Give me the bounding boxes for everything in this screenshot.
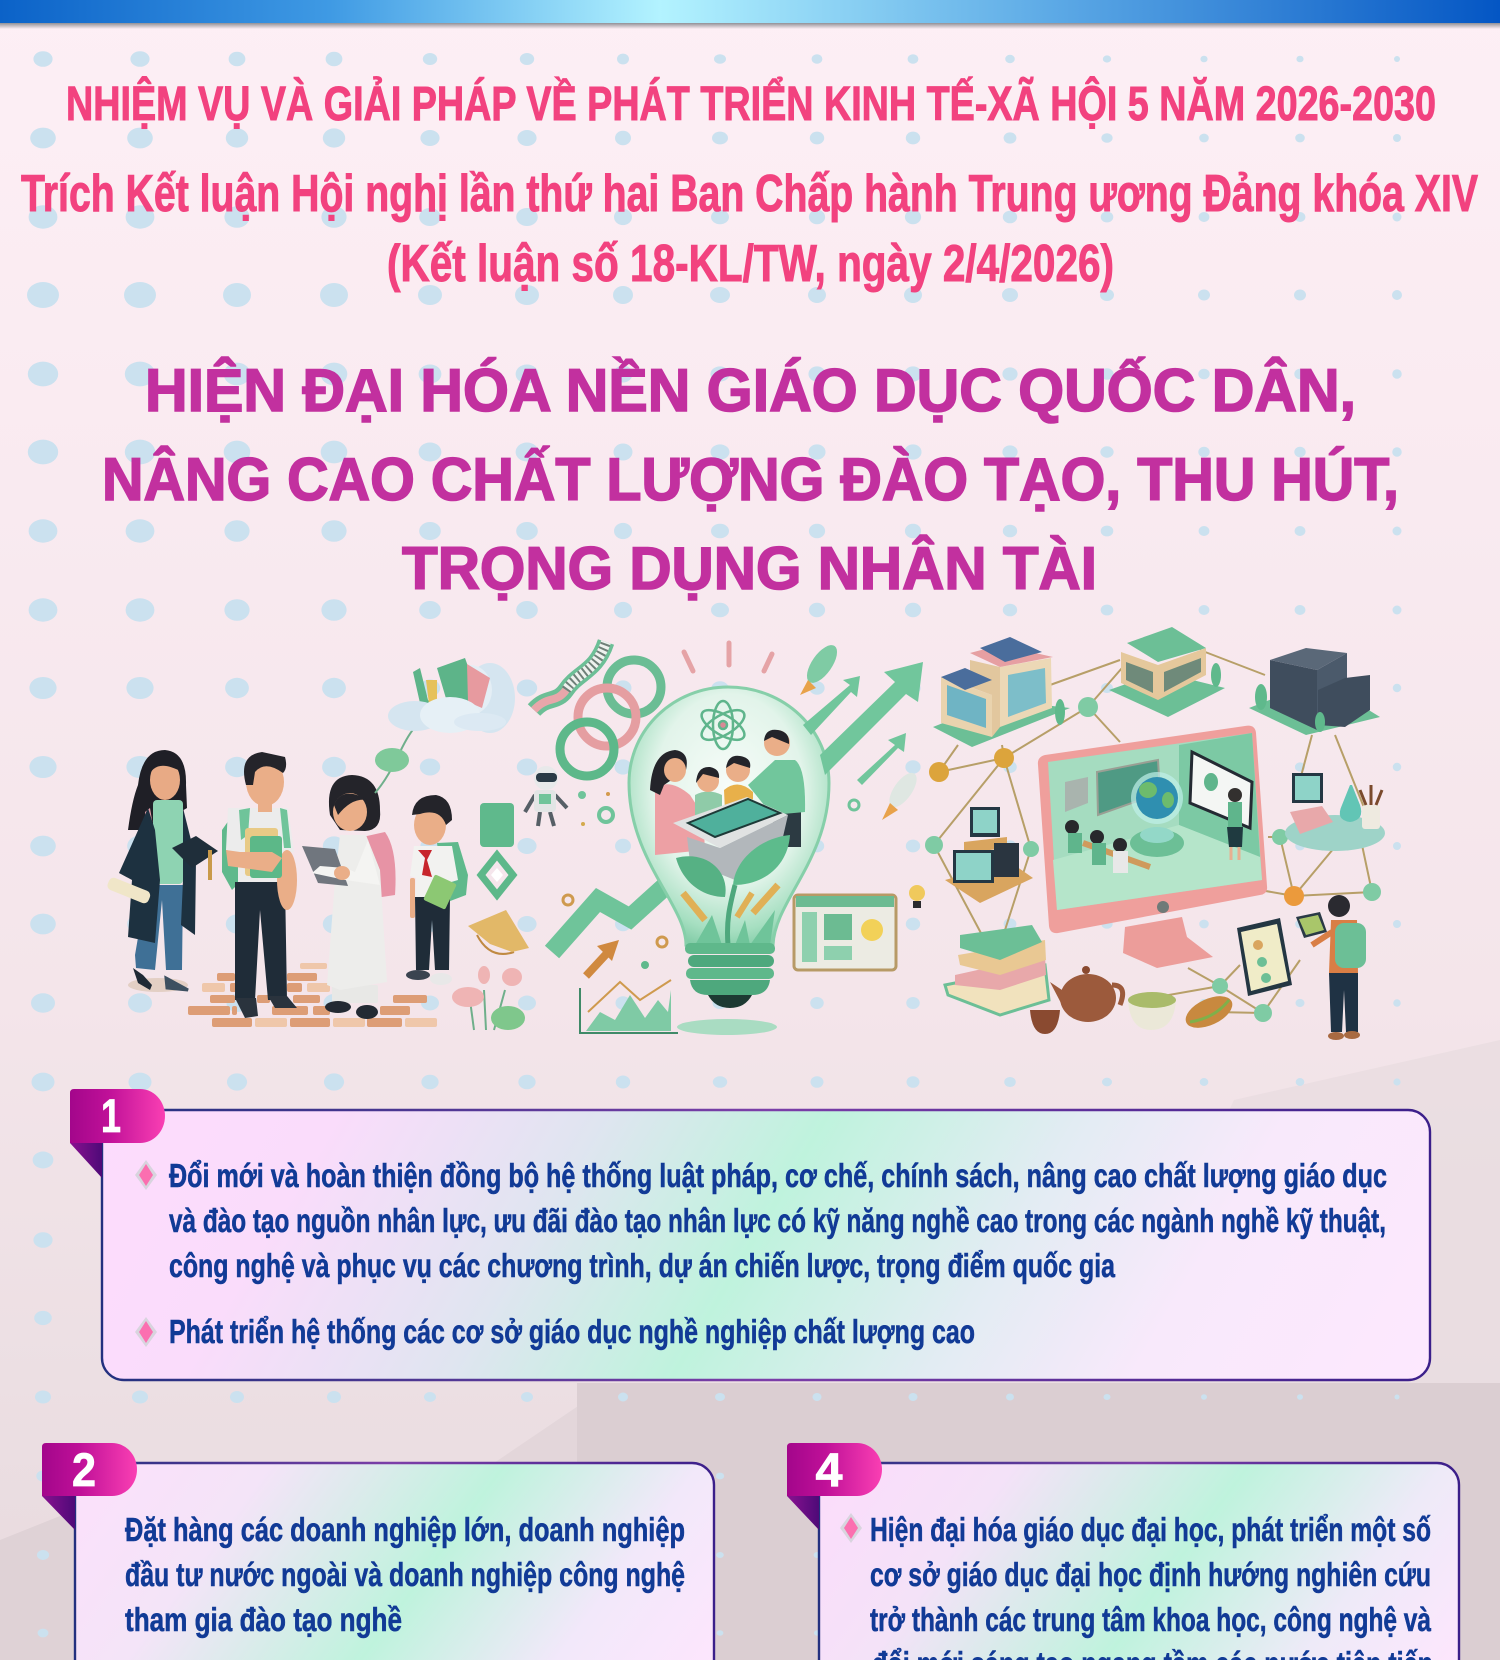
card 4: [787, 1443, 1459, 1660]
DNA helix: [534, 642, 606, 710]
light rays: [684, 643, 772, 671]
card 4 badge: 4: [816, 1443, 842, 1496]
title: reference line: (Kết luận số 18-KL/TW, ngày 2/4/2026): [387, 235, 1114, 293]
ao dai schoolgirl: [302, 775, 396, 1019]
student with tablet and backpack: [1296, 895, 1366, 1040]
bulb screw base: [685, 943, 775, 1008]
heading: [102, 357, 1399, 602]
card 2 text: [125, 1511, 685, 1638]
card 1 badge: [70, 1089, 165, 1178]
card 2 text: Đặt hàng các doanh nghiệp lớn, doanh nghiệp: [125, 1511, 685, 1548]
bricks: [188, 963, 437, 1027]
illustration: [106, 627, 1385, 1040]
school building: [933, 637, 1070, 747]
teacher: [1227, 788, 1243, 860]
phone checklist: [1237, 918, 1292, 996]
pho bowl: [1128, 992, 1176, 1030]
conical hat: [468, 910, 529, 954]
banh mi: [1181, 990, 1237, 1034]
heading: TRỌNG DỤNG NHÂN TÀI: [402, 535, 1097, 602]
green ground shadow: [677, 1019, 777, 1035]
zigzag arrow: [552, 880, 672, 952]
young boy with red scarf: [406, 795, 468, 985]
heading: NÂNG CAO CHẤT LƯỢNG ĐÀO TẠO, THU HÚT,: [102, 446, 1399, 513]
light bulb: [629, 687, 829, 1008]
robot: [525, 766, 567, 826]
cloud with books: [375, 658, 515, 793]
card 2: [42, 1443, 714, 1660]
bullet one: công nghệ và phục vụ các chương trình, dự án chiến lược, trọng điểm quốc gia: [169, 1247, 1115, 1284]
teapot and cup: [1030, 966, 1123, 1034]
small green dots: [563, 791, 667, 969]
bullet one: [135, 1157, 1387, 1284]
card 2 text: tham gia đào tạo nghề: [125, 1601, 402, 1638]
atom icon: [697, 701, 749, 749]
card 2 panel: [75, 1463, 714, 1660]
orange arrow: [586, 940, 619, 976]
card 1: [70, 1089, 1430, 1380]
card 4 badge: [787, 1443, 882, 1530]
plant leaves: [676, 835, 790, 945]
lotus: [452, 966, 525, 1030]
card 4 text: [870, 1511, 1433, 1660]
card 4 panel: [819, 1463, 1459, 1660]
network lines: [934, 650, 1372, 1013]
family group: [650, 730, 805, 855]
stack of books: [945, 925, 1049, 1015]
small idea bulb: [909, 885, 925, 908]
green book: [480, 803, 514, 847]
card 1 panel: [102, 1110, 1430, 1380]
heading: HIỆN ĐẠI HÓA NỀN GIÁO DỤC QUỐC DÂN,: [145, 357, 1356, 424]
top bar: [0, 0, 1500, 29]
network nodes: [925, 697, 1381, 1022]
bullet two: Phát triển hệ thống các cơ sở giáo dục nghề nghiệp chất lượng cao: [169, 1313, 975, 1350]
hologram globe: [1130, 772, 1184, 857]
classroom boards: [1065, 752, 1252, 828]
table with art supplies: [1285, 773, 1385, 851]
graduate woman: [106, 750, 218, 992]
library building: [1109, 627, 1225, 717]
students at desks: [1065, 820, 1150, 873]
card 2 text: đầu tư nước ngoài và doanh nghiệp công nghệ: [125, 1556, 685, 1593]
small line chart: [580, 980, 678, 1033]
server racks: [1249, 648, 1380, 735]
smart table: [673, 797, 788, 880]
browser window card: [794, 895, 896, 970]
computer desk: [945, 807, 1033, 903]
diamond emblem: [481, 855, 513, 895]
growth arrows and rockets: [800, 640, 923, 820]
card 1 badge: 1: [101, 1089, 121, 1142]
linked rings: [560, 660, 661, 776]
male student: [222, 752, 297, 1018]
card 2 badge: [42, 1443, 137, 1530]
card 4 bullet diamond: [840, 1513, 862, 1543]
card 2 badge: 2: [72, 1443, 96, 1496]
monitor with virtual classroom: [1038, 726, 1267, 968]
